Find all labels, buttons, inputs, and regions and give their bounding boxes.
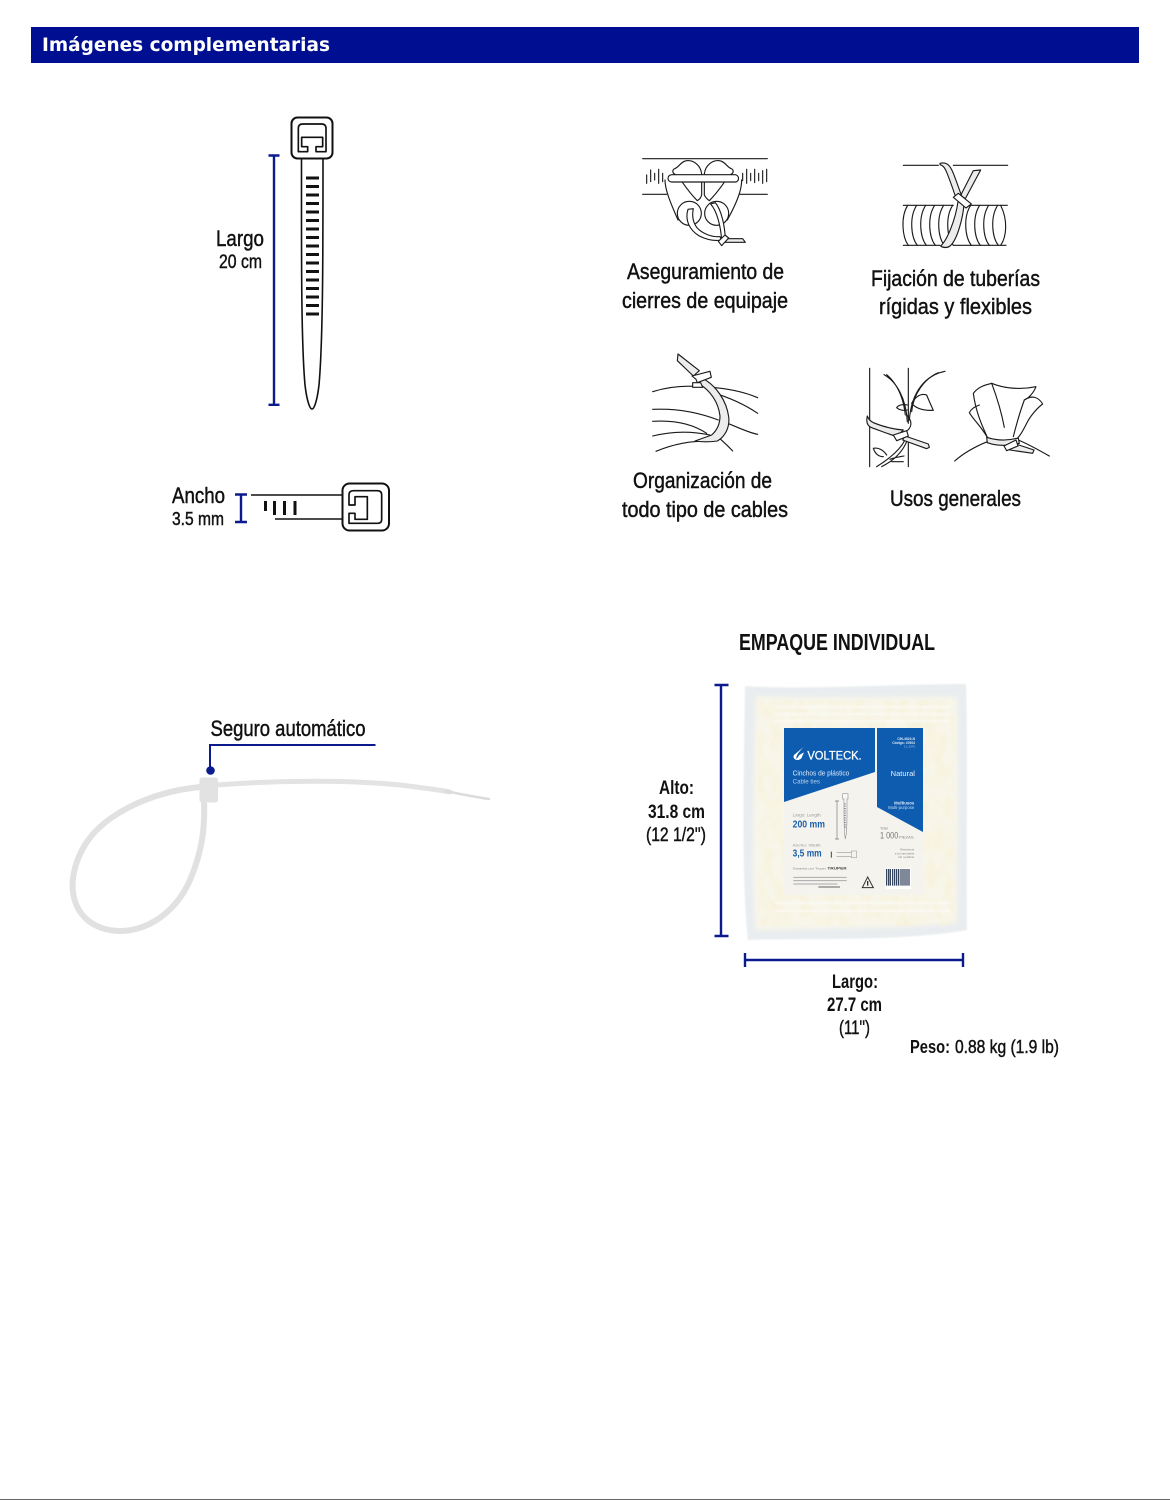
label text and marks: 200 mm [793, 819, 825, 830]
label: package length: 27.7 cm [827, 995, 882, 1016]
icon: flexible pipe [903, 163, 1008, 247]
caption: Aseguramiento de cierres de equipaje: cierres de equipaje [622, 288, 788, 313]
label: package length [827, 972, 882, 1039]
heading: Imágenes complementarias: Imágenes complementarias [42, 34, 330, 56]
dimension line: width [235, 494, 247, 522]
panel: luggage use [622, 159, 788, 313]
panel: general use [867, 368, 1049, 511]
caption: Organización de todo tipo de cables [622, 468, 788, 522]
label text and marks: 1L-1070 [904, 745, 915, 749]
label text and marks: Largo: Length [793, 813, 821, 818]
label: package height: (12 1/2'') [646, 825, 706, 846]
dimension line: package height [714, 685, 728, 936]
caption: Aseguramiento de cierres de equipaje [622, 259, 788, 313]
label text and marks: 1 000 [880, 831, 898, 841]
caption: Organización de todo tipo de cables: Organización de [633, 468, 772, 493]
blue label left [784, 728, 875, 802]
label text and marks: CIN-4523-N [897, 737, 916, 741]
label: package length: Largo: [832, 972, 878, 993]
label text and marks: No reutilizar [898, 855, 914, 859]
callout leader with dot [206, 745, 376, 775]
cable tie drawing, vertical [292, 118, 332, 409]
label text and marks: Resistente [900, 848, 915, 852]
label: package weight: 0.88 kg (1.9 lb) [955, 1037, 1059, 1057]
label: Seguro automático: Seguro automático [210, 716, 366, 741]
label text and marks: Total [880, 826, 888, 830]
caption: Organización de todo tipo de cables: todo tipo de cables [622, 497, 788, 522]
label: package weight: Peso: [910, 1037, 950, 1057]
caption: Fijación de tuberías rígidas y flexibles [871, 266, 1040, 319]
label: package length: (11'') [839, 1018, 870, 1039]
label text and marks: Multiusos [894, 800, 915, 805]
label text and marks: a la intemperie [895, 851, 915, 855]
label: package height: Alto: [659, 778, 694, 799]
caption: Usos generales: Usos generales [890, 486, 1021, 511]
caption: Fijación de tuberías rígidas y flexibles: rígidas y flexibles [879, 294, 1032, 319]
label: package weight [910, 1037, 1059, 1057]
dimension line: package length [745, 953, 963, 967]
cable tie photo, looped [73, 778, 489, 931]
label: 3.5 mm: 3.5 mm [172, 509, 224, 529]
icon: bundled cables [653, 354, 758, 451]
label text and marks: Garantía por Truper [793, 867, 826, 871]
panel: package photo [744, 684, 967, 940]
label: Largo: Largo [216, 226, 264, 251]
blue label right [877, 728, 923, 832]
panel: length diagram [216, 118, 332, 409]
label text and marks: Ancho: Width [793, 843, 821, 848]
label: package height [646, 778, 706, 846]
label text and marks: VOLTECK. [807, 748, 862, 762]
label text and marks: Multi-purpose [888, 805, 915, 810]
panel: automatic lock [73, 716, 489, 931]
label text and marks: TRUPER [827, 867, 848, 871]
caption: Aseguramiento de cierres de equipaje: Aseguramiento de [627, 259, 784, 284]
label text and marks: Natural [891, 769, 915, 778]
label text and marks [793, 737, 916, 889]
label: package height: 31.8 cm [648, 802, 705, 823]
plastic bag [744, 684, 967, 940]
panel: width diagram [172, 483, 389, 530]
label text and marks: Código: 47603 [892, 741, 915, 745]
label: 20 cm: 20 cm [219, 252, 262, 273]
dimension line: length [268, 155, 280, 405]
label text and marks: Cinchos de plástico [793, 771, 849, 778]
label: Ancho: Ancho [172, 483, 225, 508]
panel: pipes use [871, 163, 1040, 319]
caption: Fijación de tuberías rígidas y flexibles: Fijación de tuberías [871, 266, 1040, 291]
cable tie head, horizontal [251, 484, 389, 530]
label text and marks: Cable ties [793, 778, 820, 785]
icon: luggage zipper [643, 159, 767, 246]
label text and marks: 3,5 mm [793, 849, 822, 860]
icon: plant and bag [867, 368, 1049, 467]
panel: cables use [622, 354, 788, 522]
label text and marks: PIEZAS [899, 835, 915, 839]
heading: EMPAQUE INDIVIDUAL: EMPAQUE INDIVIDUAL [739, 629, 935, 655]
product label [784, 728, 923, 895]
header bar [31, 27, 1139, 63]
